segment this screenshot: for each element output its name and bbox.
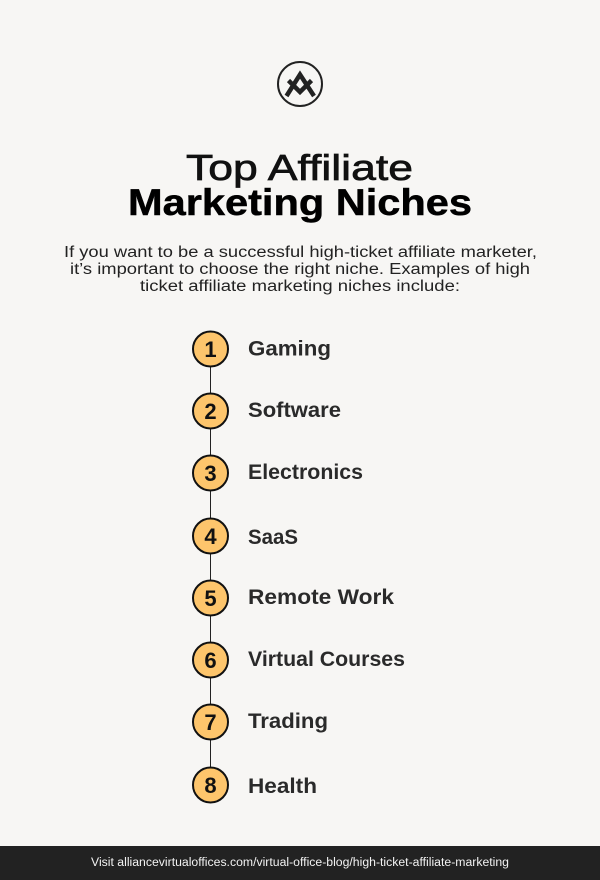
list item 8: Health xyxy=(193,768,317,802)
footer bar: Visit alliancevirtualoffices.com/virtual-office-blog/high-ticket-affiliate-marketing xyxy=(91,857,509,869)
list item 4: SaaS xyxy=(193,518,298,554)
intro text: ticket affiliate marketing niches include: xyxy=(140,278,460,295)
list item 6: Virtual Courses xyxy=(193,642,405,678)
timeline connector xyxy=(210,349,212,785)
list item 2: Software: 2 xyxy=(204,399,217,424)
icon: logo xyxy=(278,62,322,106)
list item 1: Gaming: Gaming xyxy=(248,338,331,360)
list item 1: Gaming: 1 xyxy=(204,337,217,362)
list item 1: Gaming xyxy=(193,332,331,366)
list item 8: Health: Health xyxy=(248,775,317,798)
list item 5: Remote Work: Remote Work xyxy=(248,586,394,609)
list item 4: SaaS: SaaS xyxy=(248,526,298,549)
intro text xyxy=(64,244,537,295)
list item 2: Software xyxy=(193,394,341,428)
list item 6: Virtual Courses: 6 xyxy=(204,648,217,673)
list item 7: Trading xyxy=(193,704,328,740)
intro text: it’s important to choose the right niche. Examples of high xyxy=(70,261,530,278)
list item 7: Trading: Trading xyxy=(248,710,328,733)
list item 6: Virtual Courses: Virtual Courses xyxy=(248,648,405,671)
list item 3: Electronics: 3 xyxy=(204,461,217,486)
intro text: If you want to be a successful high-ticket affiliate marketer, xyxy=(64,244,537,261)
list item 5: Remote Work xyxy=(193,580,394,616)
list item 5: Remote Work: 5 xyxy=(204,586,217,611)
list item 3: Electronics xyxy=(193,456,363,490)
list item 2: Software: Software xyxy=(248,399,341,422)
list item 7: Trading: 7 xyxy=(204,710,217,735)
title xyxy=(128,147,472,223)
title: Top Affiliate xyxy=(186,147,413,188)
list item 8: Health: 8 xyxy=(204,773,217,798)
title: Marketing Niches xyxy=(128,182,472,223)
footer bar xyxy=(0,846,600,880)
list item 3: Electronics: Electronics xyxy=(248,461,363,484)
list item 4: SaaS: 4 xyxy=(204,524,217,549)
